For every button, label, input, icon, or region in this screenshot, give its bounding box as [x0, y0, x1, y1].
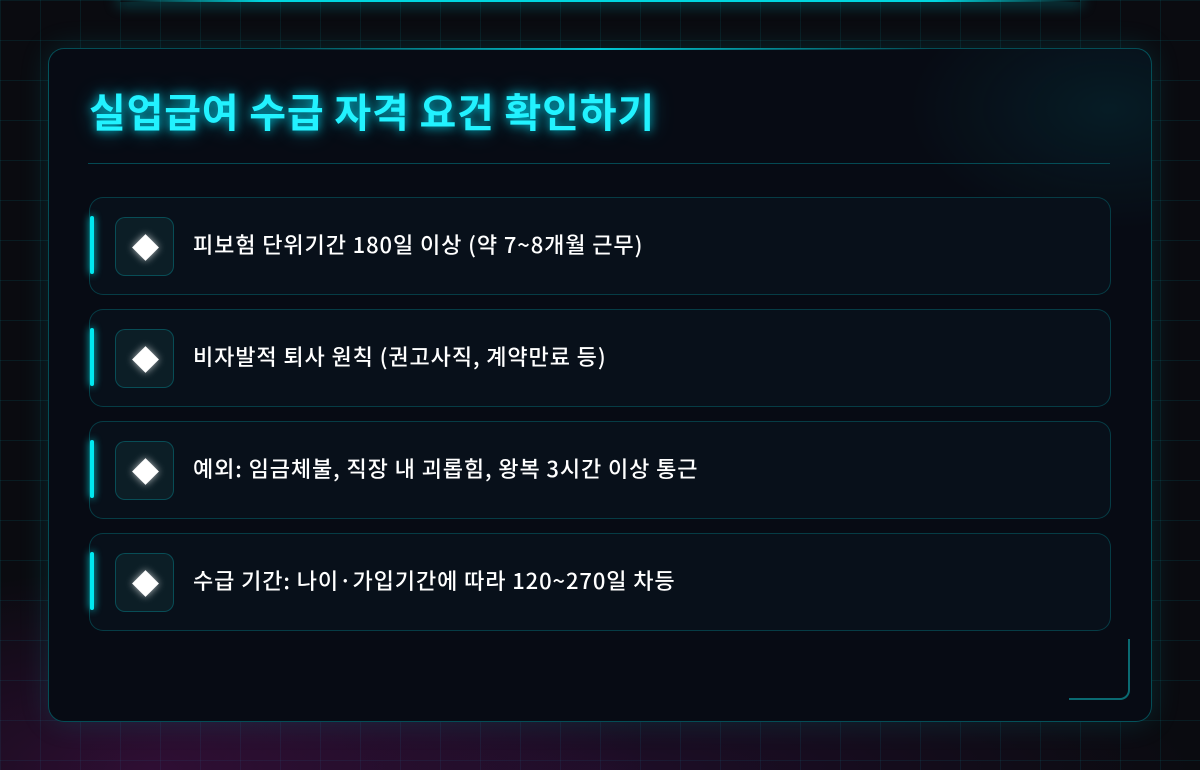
item 2: [89, 309, 1111, 407]
title: 실업급여 수급 자격 요건 확인하기: [89, 81, 655, 139]
item 3: [89, 421, 1111, 519]
item 2: 비자발적 퇴사 원칙 (권고사직, 계약만료 등): [193, 340, 607, 372]
item 4: [89, 533, 1111, 631]
item 4: 수급 기간: 나이·가입기간에 따라 120~270일 차등: [193, 564, 676, 596]
item 3: 예외: 임금체불, 직장 내 괴롭힘, 왕복 3시간 이상 통근: [193, 452, 698, 484]
item 1: [89, 197, 1111, 295]
corner bracket: [1069, 639, 1130, 700]
item 1: 피보험 단위기간 180일 이상 (약 7~8개월 근무): [193, 228, 643, 260]
